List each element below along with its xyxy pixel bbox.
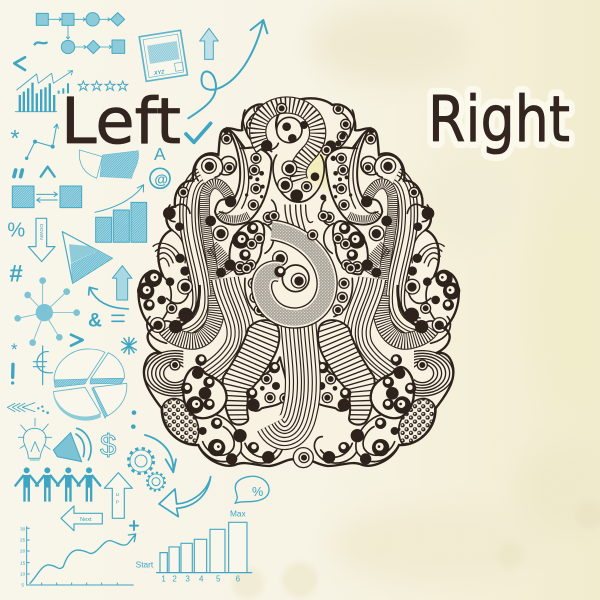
quotation marks [14, 170, 22, 177]
bottom centre eye [293, 448, 313, 468]
start to max bar chart: 2 [172, 575, 177, 584]
icons: lower left [7, 311, 269, 588]
dotted lower lobe [162, 398, 199, 444]
small asterisk: * [11, 340, 18, 359]
next arrow: Next [80, 517, 92, 523]
flowchart [36, 13, 125, 54]
inner stripe band [207, 278, 241, 377]
euro sign [33, 346, 52, 385]
strip dots [245, 153, 265, 210]
big loop arrow [188, 20, 267, 118]
line chart: 10 [20, 572, 26, 577]
line chart: 25 [20, 538, 26, 543]
light bulb [18, 418, 52, 460]
dotted strip hook [215, 129, 272, 225]
right hemisphere pattern (mirror) [282, 104, 460, 465]
at sign: @ [154, 171, 168, 187]
round lobe [183, 367, 227, 418]
hook hatching [219, 212, 248, 219]
equals [112, 315, 124, 321]
squares with exchange arrows [12, 186, 82, 208]
start to max bar chart: Start [136, 559, 154, 569]
left hemisphere pattern [137, 104, 315, 465]
pie chart [53, 349, 127, 421]
hash: # [9, 261, 23, 288]
line chart small [25, 124, 58, 160]
pyramid [62, 232, 112, 283]
plus sign [130, 521, 138, 530]
chevrons [7, 403, 35, 412]
outer stripe tentacle [177, 177, 202, 327]
less-than sign [14, 57, 25, 70]
curved arrow [89, 287, 128, 309]
dollar sign: $ [100, 429, 116, 462]
title: Right: Right [428, 83, 570, 156]
tilde [35, 42, 47, 44]
exclamation [11, 364, 14, 385]
start to max bar chart: 6 [236, 575, 241, 584]
down arrow: DOWN [38, 224, 44, 240]
top question-mark swirl [258, 105, 318, 182]
four people [15, 467, 100, 502]
ringed eyes [137, 104, 290, 456]
rising bar chart [15, 71, 73, 112]
check mark [186, 123, 211, 142]
megaphone [53, 428, 91, 462]
line chart: 5 [21, 583, 24, 588]
up arrow hatched [200, 28, 218, 59]
stars [78, 81, 128, 90]
start to max bar chart: 4 [199, 575, 204, 584]
caret [41, 167, 55, 177]
brain silhouette outline [139, 98, 459, 466]
title: Right: Right [428, 83, 570, 156]
up arrow filled [112, 266, 132, 300]
window chart: XYZ [153, 69, 166, 77]
concentric wave lobe [144, 351, 206, 396]
line chart [20, 526, 136, 588]
heart lobe [248, 357, 287, 411]
line chart: 15 [20, 560, 26, 565]
hatched band upper [204, 184, 230, 298]
at sign [150, 168, 170, 188]
down arrow [28, 218, 55, 262]
lower leaf with stripes [223, 320, 279, 425]
next arrow [61, 506, 102, 531]
dark dots [157, 128, 280, 465]
big curved arrow [159, 477, 211, 517]
up arrow labeled [104, 473, 132, 518]
strip inner lines [219, 133, 249, 213]
ampersand: & [88, 311, 102, 332]
swirl centre eyes [261, 103, 308, 151]
up arrow labeled: P [116, 499, 120, 505]
brain doodle [137, 98, 460, 468]
greater than [71, 335, 83, 346]
cluster blob [229, 221, 264, 274]
start to max bar chart: 1 [161, 575, 166, 584]
spiral centre [274, 230, 318, 292]
window chart [139, 30, 187, 81]
exploded pie fragment [79, 150, 139, 178]
up arrow labeled: U [116, 492, 120, 498]
title: Left: Left [61, 85, 181, 158]
large asterisk [122, 337, 136, 354]
upper centre vertical stripes [285, 205, 313, 240]
side lobe concentric stripes [153, 230, 185, 267]
thick tentacle line [177, 285, 200, 327]
speech bubble percent [235, 476, 269, 503]
central stipple spiral [262, 230, 327, 318]
start to max bar chart [136, 509, 252, 584]
percent sign: % [7, 220, 25, 242]
scattered dots [37, 405, 136, 429]
start to max bar chart: 5 [216, 575, 221, 584]
brain silhouette fill [139, 98, 459, 466]
start to max bar chart: Max [230, 509, 247, 519]
network diagram [14, 277, 80, 346]
bar chart with arrow [95, 185, 147, 242]
icons: upper left [7, 13, 267, 346]
start to max bar chart: 3 [185, 575, 190, 584]
letter A: A [154, 144, 166, 164]
central trunk stripes [273, 320, 303, 432]
asterisk: * [10, 125, 19, 151]
top centre eyes [278, 132, 346, 202]
line chart: 20 [20, 549, 26, 554]
hatch beside cluster [212, 247, 232, 272]
lobe curves [147, 110, 315, 463]
gears [128, 448, 165, 491]
curved arrow [145, 435, 176, 472]
line chart: 30 [20, 526, 26, 531]
hatched band lower [165, 295, 216, 341]
yellow glow at top centre [303, 145, 357, 188]
speech bubble percent: % [252, 485, 263, 499]
